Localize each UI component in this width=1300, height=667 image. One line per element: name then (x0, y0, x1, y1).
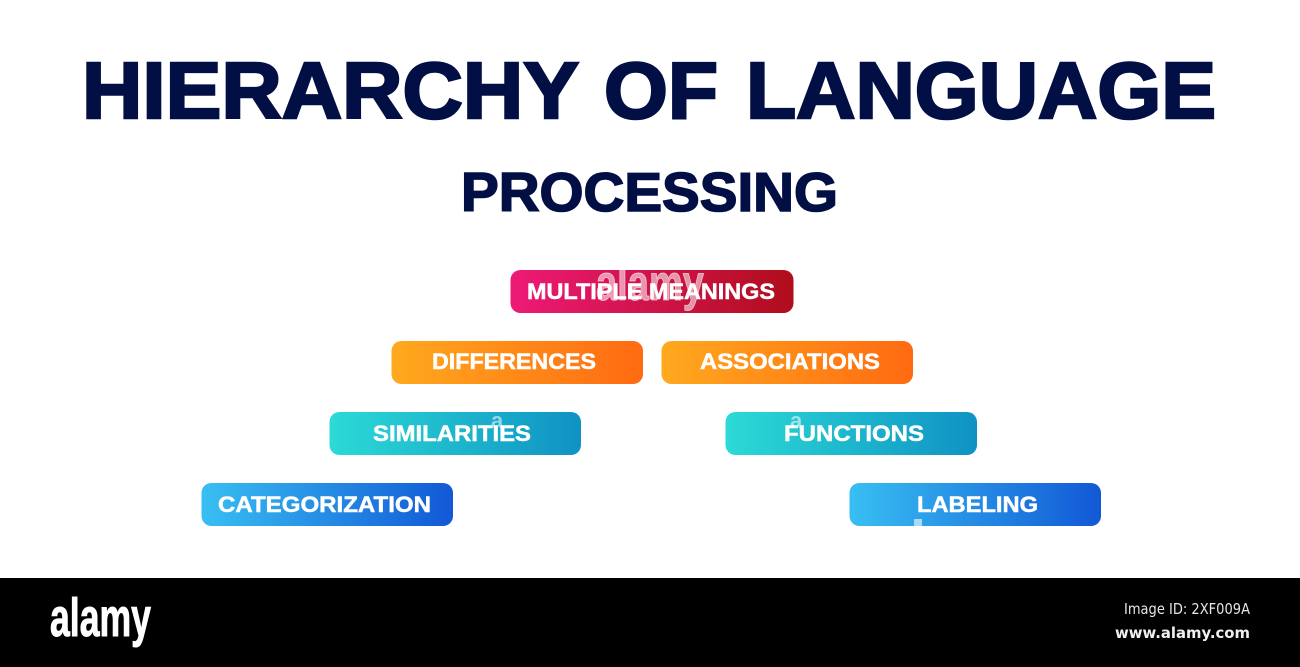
watermark: alamy (596, 255, 704, 311)
title: LANGUAGE (746, 46, 1216, 135)
box: multiple meanings (510, 255, 794, 313)
box: functions: FUNCTIONS (784, 421, 924, 446)
title (82, 46, 1216, 135)
box: differences (392, 341, 643, 384)
box: similarities (330, 408, 581, 455)
watermark fragment (914, 519, 922, 526)
box: differences: DIFFERENCES (432, 349, 596, 374)
footer bar (0, 578, 1300, 667)
title: OF (604, 46, 718, 135)
box: functions (726, 408, 977, 455)
box: associations: ASSOCIATIONS (700, 349, 880, 374)
box: multiple meanings: MULTIPLE MEANINGS (527, 279, 775, 304)
watermark fragment: a (491, 408, 504, 433)
title: HIERARCHY (82, 46, 579, 135)
website: www.alamy.com (1115, 624, 1250, 642)
box: labeling: LABELING (917, 492, 1038, 517)
box: associations (662, 341, 913, 384)
footer logo: alamy (50, 588, 151, 648)
box: categorization: CATEGORIZATION (218, 492, 431, 517)
box: labeling (850, 483, 1101, 526)
box: similarities: SIMILARITIES (373, 421, 531, 446)
box: categorization (202, 483, 453, 526)
subtitle: PROCESSING (461, 161, 838, 223)
watermark fragment: a (790, 408, 803, 433)
image id: Image ID: 2XF009A (1124, 600, 1251, 618)
